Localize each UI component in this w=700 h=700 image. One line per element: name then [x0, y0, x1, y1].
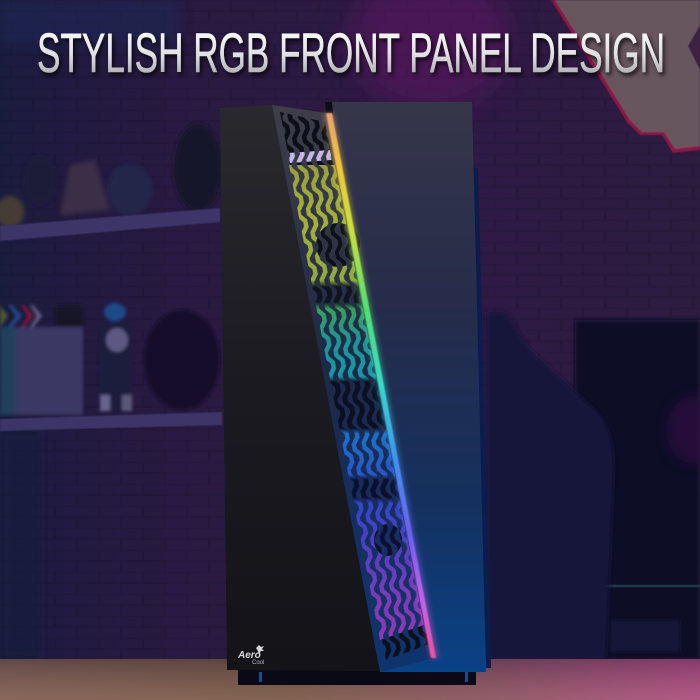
PC case	[220, 102, 491, 685]
RGB light strip glow	[323, 113, 439, 658]
table top	[0, 659, 700, 700]
upper shelf	[0, 208, 220, 241]
dark fan hubs	[316, 223, 402, 556]
dark mesh holes	[280, 112, 429, 660]
logo: AeroCool: Aero	[237, 650, 261, 661]
left front face	[220, 105, 382, 671]
bright light row	[288, 150, 332, 163]
RGB light through mesh	[289, 165, 424, 640]
panel top corner	[325, 102, 333, 114]
logo: AeroCool	[237, 645, 264, 666]
toys on lower shelf	[0, 303, 220, 415]
toys on upper shelf	[0, 124, 222, 228]
background: pale neon sign top right	[551, 0, 700, 153]
RGB light strip	[326, 113, 436, 658]
lower shelf	[0, 412, 222, 431]
background: wall shelves with toys	[0, 124, 222, 431]
side edge	[472, 168, 491, 668]
right front face	[325, 102, 486, 672]
case feet	[238, 670, 476, 685]
background: monitor and chair on the right	[486, 312, 700, 660]
logo: AeroCool: Cool	[252, 660, 264, 666]
angled mesh panel	[272, 102, 435, 672]
